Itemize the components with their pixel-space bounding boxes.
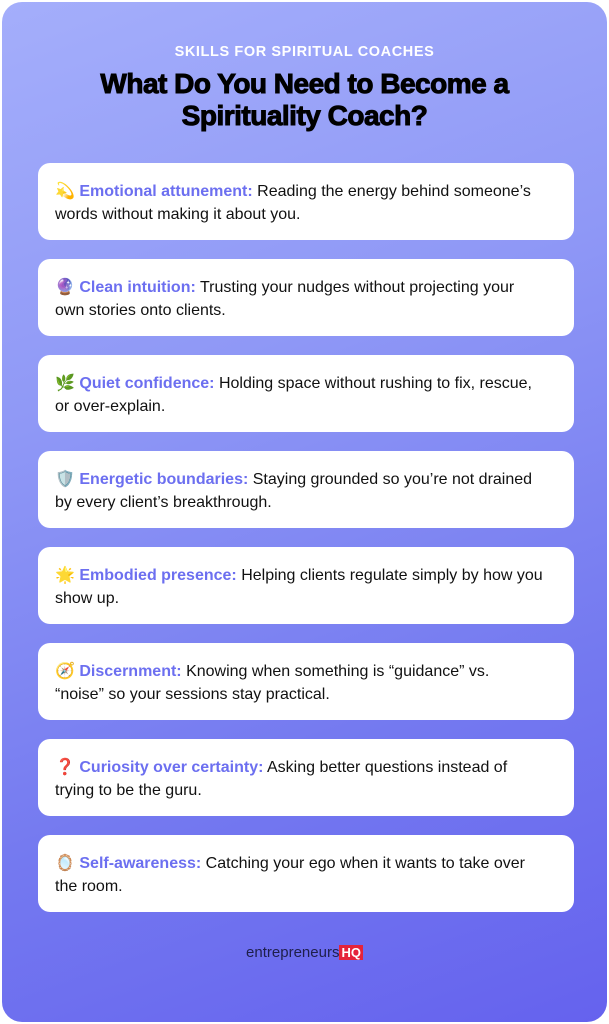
logo: entrepreneursHQ <box>246 944 361 961</box>
card: curiosity over certainty <box>38 739 574 816</box>
card: clean intuition <box>38 259 574 336</box>
card: clean intuition: 🔮 Clean intuition: Trusting your nudges without projecting your <box>55 279 514 296</box>
card: embodied presence: show up. <box>55 590 119 607</box>
card: quiet confidence: or over-explain. <box>55 398 165 415</box>
card: discernment: “noise” so your sessions stay practical. <box>55 686 330 703</box>
card: quiet confidence: 🌿 Quiet confidence: Holding space without rushing to fix, rescue, <box>55 375 532 392</box>
card: energetic boundaries: 🛡️ Energetic boundaries: Staying grounded so you’re not drained <box>55 471 532 488</box>
card: embodied presence <box>38 547 574 624</box>
card: curiosity over certainty: ❓ Curiosity over certainty: Asking better questions instead of <box>55 759 507 776</box>
card: discernment: 🧭 Discernment: Knowing when something is “guidance” vs. <box>55 663 489 680</box>
card: energetic boundaries <box>38 451 574 528</box>
title <box>100 68 510 132</box>
card: energetic boundaries: by every client’s breakthrough. <box>55 494 272 511</box>
card: emotional attunement: words without making it about you. <box>55 206 300 223</box>
card: emotional attunement: 💫 Emotional attunement: Reading the energy behind someone’s <box>55 183 531 200</box>
title: What Do You Need to Become a <box>100 68 509 99</box>
card: curiosity over certainty: trying to be the guru. <box>55 782 202 799</box>
title: Spirituality Coach? <box>182 100 427 131</box>
card: emotional attunement <box>38 163 574 240</box>
card: self-awareness: the room. <box>55 878 123 895</box>
card: self-awareness: 🪞 Self-awareness: Catching your ego when it wants to take over <box>55 855 525 872</box>
card: quiet confidence <box>38 355 574 432</box>
card: discernment <box>38 643 574 720</box>
card: embodied presence: 🌟 Embodied presence: Helping clients regulate simply by how you <box>55 567 543 584</box>
card: clean intuition: own stories onto clients. <box>55 302 226 319</box>
eyebrow heading: SKILLS FOR SPIRITUAL COACHES <box>175 44 434 60</box>
card: self-awareness <box>38 835 574 912</box>
